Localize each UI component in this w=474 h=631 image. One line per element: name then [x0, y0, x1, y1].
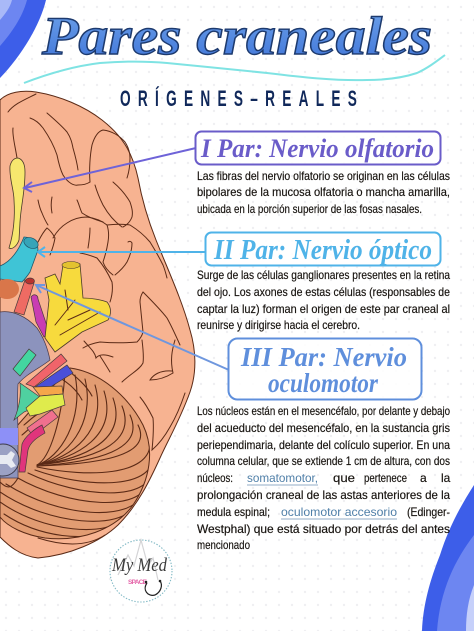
text block: III par: prolongación craneal de las astas anteriores de la — [197, 488, 450, 502]
text block: II par: reunirse y dirigirse hacia el cerebro. — [197, 318, 360, 332]
text block: III par: Westphal) que está situado por detrás del antes — [197, 522, 450, 536]
tube: lime — [26, 394, 65, 416]
text block: III par: oculomotor accesorio — [281, 505, 397, 519]
optic nerve end — [22, 235, 40, 251]
brainstem — [0, 312, 50, 478]
panel: III par heading: oculomotor — [268, 368, 378, 398]
text block: III par: pertenece — [364, 471, 407, 485]
nerve: olfactory, yellow — [9, 158, 25, 249]
text block: II par — [197, 268, 450, 332]
text block: I par: bipolares de la mucosa olfatoria o mancha amarilla, — [197, 185, 450, 199]
panel: III par heading: III Par: Nervio — [240, 342, 407, 372]
text block: III par: la — [441, 471, 451, 485]
arrow: optic — [38, 247, 206, 257]
cerebrum — [0, 91, 195, 558]
brain folds — [8, 94, 185, 544]
fan: green — [14, 383, 40, 420]
nerve: trigeminal, yellow — [45, 263, 110, 352]
brainstem band — [0, 428, 18, 445]
text block: III par: somatomotor, — [247, 471, 318, 485]
tube: blue — [35, 365, 73, 389]
text block: III par: a — [420, 471, 427, 485]
text block: III par: núcleos: — [197, 471, 233, 485]
logo: My Med Space: SPACE — [128, 579, 148, 586]
text block: III par: mencionado — [197, 538, 250, 552]
arrow: oculomotor — [36, 285, 229, 370]
nerve: oculomotor, red — [14, 280, 34, 315]
panel: I par heading: I Par: Nervio olfatorio — [200, 134, 434, 163]
text block: III par — [197, 404, 451, 552]
title underline — [24, 55, 445, 83]
tube: red — [26, 354, 67, 387]
text block: I par: ubicada en la porción superior de las fosas nasales. — [197, 202, 422, 216]
orange chiasm — [0, 279, 19, 299]
trigeminal details — [55, 262, 100, 335]
tube: orange — [33, 386, 63, 396]
tube: pink — [27, 410, 58, 436]
arrow: olfactory — [24, 148, 196, 192]
panel: II par heading: II Par: Nervio óptico — [213, 235, 432, 266]
logo: My Med Space: My Med — [111, 555, 167, 576]
logo: My Med Space — [110, 540, 172, 602]
decorative blob: bottom right — [422, 485, 474, 631]
brain illustration — [0, 91, 195, 558]
subtitle: ORÍGENES–REALES — [120, 86, 357, 111]
oculomotor end — [26, 278, 34, 284]
text block: III par: medula espinal; — [197, 505, 270, 519]
text block: I par — [197, 169, 450, 216]
nerve: optic, cyan — [0, 237, 38, 282]
text block: III par: del acueducto del mesencéfalo, en la sustancia gris — [197, 421, 450, 435]
cerebellum — [0, 368, 150, 539]
decorative blob: top left — [0, 0, 46, 78]
text block: III par: que — [333, 471, 355, 485]
text block: II par: captar la luz) forman el origen de este par craneal al — [197, 302, 450, 316]
tube: magenta — [19, 425, 45, 472]
nerve: magenta — [31, 295, 49, 337]
aqueduct section — [0, 444, 19, 476]
title: Pares craneales — [41, 6, 432, 66]
cerebellum folia — [0, 372, 153, 537]
panel: III par heading — [228, 338, 422, 400]
tube: green — [13, 349, 36, 376]
text block: III par: (Edinger- — [407, 505, 450, 519]
